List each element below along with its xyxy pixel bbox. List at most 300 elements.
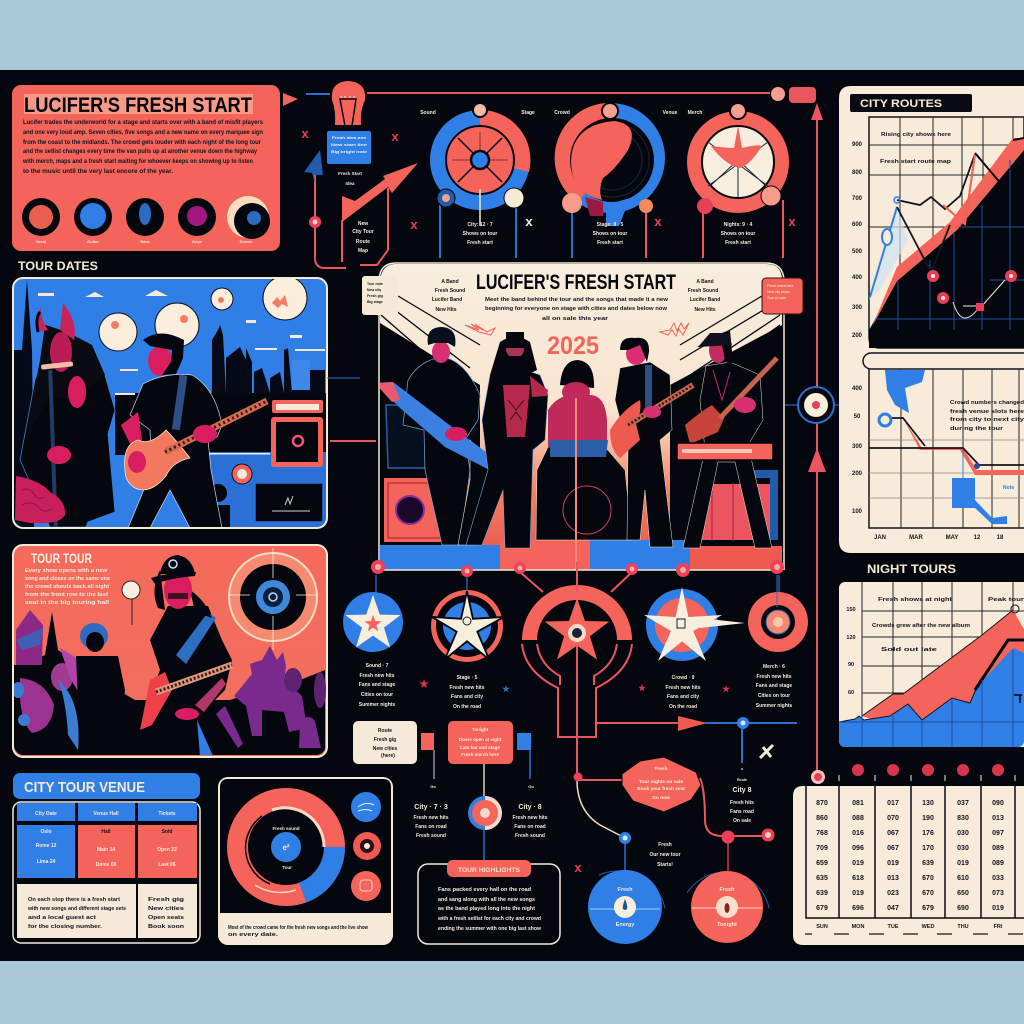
numbers: table cells: 019 <box>992 905 1004 912</box>
labels: star badge captions: Cities on tour <box>361 692 393 698</box>
text block: intro body: and one very loud amp. Seven cities, five songs and a new name on every marquee sign <box>23 130 263 136</box>
callout: coral note: Late bar and stage <box>460 745 500 750</box>
panel: city routes table: for the closing number. <box>28 924 103 930</box>
label: poster side notes right: Fresh Sound <box>688 288 718 294</box>
text: table cells: Tickets <box>158 811 176 817</box>
callout: left poster note: New city <box>367 288 381 292</box>
chart: night tours area <box>839 582 1024 747</box>
text: table cells: Sold <box>162 829 172 835</box>
arrows: right rail <box>808 103 826 472</box>
labels: table footer: TUE <box>888 924 899 930</box>
labels: hub captions: Fresh sound <box>515 833 545 839</box>
arrow: large coral arrow <box>342 163 418 222</box>
panel: outlined notes: with a fresh setlist for each city and crowd <box>437 916 541 922</box>
numbers: table cells: 096 <box>852 845 864 852</box>
numbers: table cells: 170 <box>922 845 934 852</box>
text block: panel copy: the crowd shouts back all night <box>25 584 109 590</box>
labels: lower chart axes and notes: MAY <box>946 535 958 541</box>
labels: hub captions <box>413 784 548 839</box>
labels: top chart axes and notes: 900 <box>852 142 863 148</box>
numbers: table cells: 067 <box>887 845 899 852</box>
text: table cells: Hall <box>101 829 111 835</box>
labels: lower chart axes and notes: 12 <box>974 535 981 541</box>
panel: city routes table: and a local guest act <box>28 915 96 921</box>
numbers: table cells: 016 <box>852 830 864 837</box>
labels: dial captions: Shows on tour <box>463 231 497 237</box>
heading: intro title: LUCIFER'S FRESH START <box>24 94 252 117</box>
label: poster side notes right: Lucifer Band <box>690 297 720 303</box>
timeline: poster nodes <box>371 560 784 600</box>
panel: city routes table: Open seats <box>148 915 184 921</box>
labels: top chart axes and notes: Rising city shows here <box>881 132 951 138</box>
icon: sound disk <box>228 548 318 650</box>
labels: lower chart axes and notes: fresh venue slots here <box>950 409 1024 415</box>
text block: gauge note: Starts! <box>657 862 673 868</box>
member three <box>536 447 632 540</box>
labels: night chart: 60 <box>848 690 854 696</box>
callout: cream note: New cities <box>373 746 397 752</box>
label: poster side notes right <box>688 279 720 313</box>
labels: member names: Keys <box>192 239 203 244</box>
heading: tour dates: TOUR DATES <box>18 259 98 273</box>
numbers: table cells: 019 <box>887 860 899 867</box>
callout: coral note: Tonight <box>472 727 489 732</box>
label: note caption <box>338 171 362 186</box>
icon: table nodes <box>852 764 1004 776</box>
labels: hub captions: Go <box>528 784 534 789</box>
chart: donut ring: Tour <box>282 865 292 870</box>
labels: table footer: WED <box>922 924 934 930</box>
text block: panel copy: song and closes on the same one <box>25 576 110 582</box>
text: table cells <box>35 811 177 868</box>
labels: member names: Vocal <box>36 239 46 244</box>
numbers: table cells: 023 <box>887 890 899 897</box>
labels: lower chart axes and notes: 200 <box>852 471 863 477</box>
labels: table footer: THU <box>957 924 969 930</box>
labels: star badge captions: Fans and city <box>451 694 483 700</box>
numbers: table cells: 610 <box>957 875 969 882</box>
labels: lower chart axes and notes: Crowd numbers changed <box>950 400 1024 406</box>
callout: coral hexagon <box>622 757 701 812</box>
icon: rail node <box>309 216 321 228</box>
label: poster side notes left: Lucifer Band <box>432 297 462 303</box>
text block: intro body: Lucifer trades the underworld for a stage and starts over with a band of misfit players <box>23 120 264 126</box>
chart: lower step chart <box>863 353 1024 528</box>
icon: keyhole star badge <box>522 562 632 777</box>
text block: gauge note: Our new tour <box>649 852 681 858</box>
labels: hub captions: Fresh sound <box>416 833 446 839</box>
labels: flow captions <box>730 768 754 824</box>
numbers: table cells: 679 <box>922 905 934 912</box>
labels: flow captions: * <box>741 768 743 774</box>
labels: flow captions: On sale <box>733 818 751 824</box>
labels: table footer: SUN <box>816 924 828 930</box>
heading: chart tag <box>850 94 972 112</box>
numbers: table cells: 019 <box>852 860 864 867</box>
numbers: table cells: 030 <box>957 830 969 837</box>
number: year: 2025 <box>547 332 599 360</box>
callout: blue note: Big bright note <box>331 149 368 154</box>
rays <box>381 296 780 382</box>
labels: night chart: 90 <box>848 662 854 668</box>
numbers: table cells: 830 <box>957 815 969 822</box>
panel: outlined notes <box>418 860 560 944</box>
panel: intro card <box>12 85 280 251</box>
chart: coral gauge: Fresh <box>720 887 735 893</box>
chart: top line chart <box>869 117 1024 348</box>
callout: left poster note: Fresh gig <box>367 294 383 298</box>
mark: cream cross <box>760 745 773 758</box>
labels: dial captions: Stage <box>521 110 535 116</box>
text block: arrow note: City Tour <box>352 229 374 235</box>
speakers <box>384 478 470 542</box>
numbers: table cells: 639 <box>816 890 828 897</box>
stage band <box>115 393 327 455</box>
label: poster side notes right: New Hits <box>694 307 716 313</box>
labels: member names: Bass <box>140 239 151 244</box>
clouds <box>38 290 325 371</box>
numbers: table cells: 017 <box>887 800 899 807</box>
numbers: table cells: 696 <box>852 905 864 912</box>
labels: dial captions: Shows on tour <box>593 231 627 237</box>
labels: lower chart axes and notes: JAN <box>874 535 886 541</box>
callout: blue note: Fresh idea one <box>332 135 367 140</box>
text block: gauge note <box>649 842 681 868</box>
labels: lower chart axes and notes <box>852 386 1024 541</box>
labels: star badge captions: Fresh new hits <box>359 673 395 679</box>
labels: lower chart axes and notes: 18 <box>997 535 1004 541</box>
heading: table title: CITY TOUR VENUE <box>24 779 145 796</box>
text block: arrow note: Route <box>356 239 370 245</box>
labels: star badge captions: Fresh new hits <box>449 685 485 691</box>
numbers: table cells: 860 <box>816 815 828 822</box>
labels: lower chart axes and notes: from city to next city <box>950 417 1024 423</box>
labels: star badge captions: Cities on tour <box>758 693 790 699</box>
callout: coral note <box>448 721 513 764</box>
icon: star badge four <box>644 587 745 661</box>
icon: target badge <box>748 575 808 652</box>
labels: lower chart axes and notes: 100 <box>852 509 863 515</box>
label: poster side notes right: A Band <box>696 279 714 285</box>
numbers: table cells: 639 <box>922 860 934 867</box>
label: note caption: Fresh Start <box>338 171 362 176</box>
connector lines <box>306 93 845 776</box>
callout: left poster note: Big stage <box>367 300 383 304</box>
text block: donut note: Most of the crowd came for the fresh new songs and the live show <box>228 925 369 931</box>
labels: hub captions: Fresh new hits <box>512 815 548 821</box>
numbers: table cells: 690 <box>957 905 969 912</box>
labels: dial captions: Fresh start <box>597 240 623 246</box>
arrow: coral to blue flow <box>597 716 797 763</box>
skyline <box>14 280 325 527</box>
numbers: table cells: 190 <box>922 815 934 822</box>
labels: top chart axes and notes: 600 <box>852 222 863 228</box>
labels: hub captions: City · 8 <box>518 804 542 811</box>
labels: lower chart axes and notes: 50 <box>854 414 861 420</box>
panel: city routes table: Fresh gig <box>148 897 184 903</box>
labels: star badge captions: Fans and stage <box>756 683 792 689</box>
chart: radial star dial <box>687 103 789 214</box>
callout: right poster note <box>762 278 803 314</box>
marks: small crosses <box>301 126 796 875</box>
text: table cells: Rome 12 <box>36 843 57 849</box>
member one <box>403 357 480 545</box>
text: table cells: Lima 24 <box>37 859 56 865</box>
labels: star badge captions: Fans and stage <box>359 682 395 688</box>
panel: outlined notes: as the band played long into the night <box>438 906 535 912</box>
callout: cream note: Route <box>378 728 392 734</box>
numbers: table cells: 030 <box>957 845 969 852</box>
labels: lower chart axes and notes: 300 <box>852 444 863 450</box>
text block: poster copy: all on sale this year <box>542 316 609 322</box>
labels: top chart axes and notes: 200 <box>852 333 863 339</box>
keyboard <box>677 443 773 460</box>
labels: star badge captions: Summer nights <box>359 702 395 708</box>
marks: small stars <box>419 679 730 692</box>
labels: lower chart axes and notes: MAR <box>909 535 923 541</box>
numbers: table cells: 033 <box>992 875 1004 882</box>
icon: rail medallion <box>798 387 834 423</box>
chart: blue gauge: Fresh <box>618 887 633 893</box>
labels: dial captions: City: 12 · 7 <box>467 222 493 228</box>
floor <box>380 545 500 570</box>
labels: star badge captions: Merch · 6 <box>763 664 785 670</box>
label: note caption: Idea <box>345 181 355 186</box>
numbers: table cells: 870 <box>816 800 828 807</box>
labels: flow captions: Fresh hits <box>730 800 754 806</box>
text block: intro body <box>22 120 264 175</box>
numbers: table cells: 679 <box>816 905 828 912</box>
numbers: table cells: 618 <box>852 875 864 882</box>
labels: night chart: Peak tour <box>988 597 1024 603</box>
text block: panel copy: Every show opens with a new <box>25 568 108 574</box>
chart: blue gauge <box>588 870 665 944</box>
panel: crowd guitar illustration <box>12 545 327 757</box>
labels: dial captions: Fresh start <box>725 240 751 246</box>
labels: star badge captions: Summer nights <box>756 703 792 709</box>
text: table cells: Dome 08 <box>96 862 117 868</box>
callout: blue note: New start line <box>331 142 368 147</box>
chart: hub node <box>468 764 502 860</box>
labels: dial captions <box>420 110 755 246</box>
numbers: table cells: 176 <box>922 830 934 837</box>
text block: gauge note: Fresh <box>658 842 672 848</box>
chart: radial vinyl dial <box>555 103 665 226</box>
numbers: table cells: 019 <box>852 890 864 897</box>
labels: top chart axes and notes: 800 <box>852 170 863 176</box>
numbers: table cells: 013 <box>992 815 1004 822</box>
labels: hub captions: Fans on road <box>415 824 447 830</box>
member four <box>615 362 673 547</box>
labels: star badge captions: Stage · 5 <box>457 675 478 681</box>
marks: poster doodles <box>465 323 689 336</box>
callout: right poster note: Tour on sale <box>767 296 786 300</box>
labels: star badge captions: Fresh new hits <box>665 685 701 691</box>
callout: coral hexagon: Tour nights on sale <box>639 779 683 785</box>
ground and demons <box>14 612 325 756</box>
labels: lower chart axes and notes: 400 <box>852 386 863 392</box>
text: table cells: City Date <box>35 811 57 817</box>
panel: city routes table: New cities <box>148 906 184 912</box>
text: table cells: Oslo <box>40 829 52 835</box>
table: tour numbers <box>793 764 1024 945</box>
text block: poster copy <box>485 297 669 322</box>
text block: donut note: on every date. <box>228 932 279 938</box>
labels: member names <box>36 239 253 244</box>
labels: lower chart axes and notes: Note <box>1003 485 1014 491</box>
labels: star badge captions: Crowd · 9 <box>672 675 695 681</box>
chart: blue gauge: Energy <box>616 922 635 928</box>
chart: donut ring: Fresh sound <box>272 826 300 831</box>
labels: hub captions: City · 7 · 3 <box>414 804 448 811</box>
numbers: table cells: 650 <box>957 890 969 897</box>
text block: arrow note: New <box>358 221 368 227</box>
labels: night chart: Sold out late <box>881 647 937 653</box>
numbers: table cells: 659 <box>816 860 828 867</box>
member five <box>683 362 772 548</box>
marks: small crosses: x <box>525 214 533 229</box>
callout: left poster note <box>362 276 398 315</box>
numbers: table cells: 089 <box>992 845 1004 852</box>
labels: table footer: FRI <box>994 924 1003 930</box>
heading: chart title: CITY ROUTES <box>860 98 942 110</box>
labels: top chart axes and notes: 500 <box>852 249 863 255</box>
labels: star badge captions: Fans and city <box>667 694 699 700</box>
demon singer <box>20 370 116 527</box>
text: table cells: Last 06 <box>158 862 176 868</box>
icon: light bulb <box>332 81 365 126</box>
numbers: table cells: 709 <box>816 845 828 852</box>
icon: main rail node <box>811 770 825 784</box>
labels: top chart axes and notes: 400 <box>852 275 863 281</box>
text: table cells: Main 14 <box>97 847 115 853</box>
labels: night chart: 150 <box>846 607 856 613</box>
labels: member names: Drums <box>240 239 253 244</box>
numbers: table cells: 088 <box>852 815 864 822</box>
chart: donut ring: e² <box>282 843 290 852</box>
label: poster side notes left: New Hits <box>435 307 457 313</box>
numbers: table cells: 073 <box>992 890 1004 897</box>
numbers: table cells: 067 <box>887 830 899 837</box>
panel: outlined notes: ending the summer with one big last show <box>438 926 542 932</box>
callout: cream note: Fresh gig <box>374 737 396 743</box>
callout: coral hexagon: Book your fresh seat <box>637 786 685 792</box>
marks: small crosses: x <box>301 126 309 141</box>
text block: panel copy: from the front row to the last <box>25 592 108 598</box>
panel: outlined notes: Fans packed every hall on the road <box>438 887 531 893</box>
panel: central band poster <box>375 263 785 570</box>
marks: small crosses: x <box>574 860 582 875</box>
panel: outlined notes: and sang along with all the new songs <box>438 897 535 903</box>
labels: hub captions: Fans on road <box>514 824 546 830</box>
labels: member names: Guitar <box>87 239 99 244</box>
numbers: table cells: 670 <box>922 875 934 882</box>
labels: top chart axes and notes <box>852 132 951 339</box>
labels: night chart: Crowds grew after the new album <box>872 623 971 629</box>
callout: cream note <box>353 721 417 764</box>
panel: skyline guitar illustration <box>13 276 327 528</box>
marks: small crosses: x <box>391 129 399 144</box>
labels: hub captions: Fresh new hits <box>413 815 449 821</box>
labels: flow captions: Route <box>737 778 747 782</box>
icon: coral tag circle <box>351 871 381 901</box>
panel: city routes table: On each stop there is a fresh start <box>28 897 120 903</box>
text block: intro body: to the music until the very last encore of the year. <box>23 169 173 175</box>
text block: donut note <box>228 925 369 938</box>
icons: band member portraits <box>22 196 270 239</box>
text block: arrow note <box>352 221 374 254</box>
arrow: intro pointer <box>283 93 298 106</box>
member two <box>466 370 548 548</box>
panel: city routes table <box>13 773 200 943</box>
moons <box>99 276 307 351</box>
labels: dial captions: Merch <box>688 110 702 116</box>
labels: top chart axes and notes: 300 <box>852 305 863 311</box>
arrow: blue up arrow <box>304 150 323 183</box>
chart: radial blue and coral dial <box>430 103 530 226</box>
label: poster side notes left <box>432 279 465 313</box>
icon: flags <box>421 733 531 779</box>
marks: small crosses: x <box>788 214 796 229</box>
labels: star badge captions: On the road <box>453 704 481 710</box>
panel: donut chart <box>218 777 393 945</box>
labels: dial captions: Sound <box>420 110 436 116</box>
numbers: table cells: 019 <box>957 860 969 867</box>
callout: blue note <box>327 131 371 164</box>
labels: dial captions: Venue <box>663 110 678 116</box>
chart: coral gauge <box>687 871 769 943</box>
labels: top chart axes and notes: Fresh start route map <box>880 159 951 165</box>
chart: coral gauge: Tonight <box>717 922 737 928</box>
text block: poster copy: Meet the band behind the tour and the songs that made it a new <box>485 297 669 303</box>
numbers: table cells: 768 <box>816 830 828 837</box>
guitarist with cap <box>150 606 232 700</box>
callout: left poster note: Tour note <box>367 282 383 286</box>
flow: lower connectors <box>574 772 774 880</box>
icon: star badge one <box>343 592 403 652</box>
heading: poster title: LUCIFER'S FRESH START <box>476 271 676 294</box>
panel: city routes table: Book soon <box>148 924 185 930</box>
heading: panel title: TOUR TOUR <box>31 550 92 566</box>
text block: poster copy: beginning for everyone on stage with cities and dates below now <box>485 306 668 312</box>
text block: intro body: and the setlist changes every time the van pulls up at another venue down the highway <box>23 149 258 155</box>
callout: right poster note: Fresh notes here <box>767 284 794 288</box>
panel: city routes charts <box>839 86 1024 553</box>
labels: night chart <box>846 597 1024 696</box>
numbers: table cells <box>816 800 1004 912</box>
labels: flow captions: Fans road <box>730 809 754 815</box>
text block: panel copy: seat in the big touring hall <box>25 600 110 606</box>
numbers: table cells: 635 <box>816 875 828 882</box>
text block: intro body: from the coast to the midlands. The crowd gets louder with each night of the long tour <box>23 140 262 146</box>
labels: dial captions: Fresh start <box>467 240 493 246</box>
labels: hub captions: Go <box>430 784 436 789</box>
numbers: table cells: 013 <box>887 875 899 882</box>
label: poster side notes left: A Band <box>441 279 459 285</box>
numbers: table cells: 081 <box>852 800 864 807</box>
callout: coral note: Fresh merch here <box>461 752 499 757</box>
icon: blue metric circle <box>351 792 381 822</box>
text block: intro body: with merch, maps and a fresh start waiting for whoever keeps on showing up to listen <box>22 159 253 165</box>
labels: night chart: Fresh shows at night <box>878 597 952 603</box>
heading: night tours: NIGHT TOURS <box>867 562 956 576</box>
numbers: table cells: 089 <box>992 860 1004 867</box>
icon: top rail end tag <box>771 87 816 103</box>
labels: star badge captions <box>359 663 792 710</box>
callout: cream note: (here) <box>381 753 395 759</box>
labels: table footer: MON <box>852 924 864 930</box>
chart: donut ring <box>238 798 334 896</box>
